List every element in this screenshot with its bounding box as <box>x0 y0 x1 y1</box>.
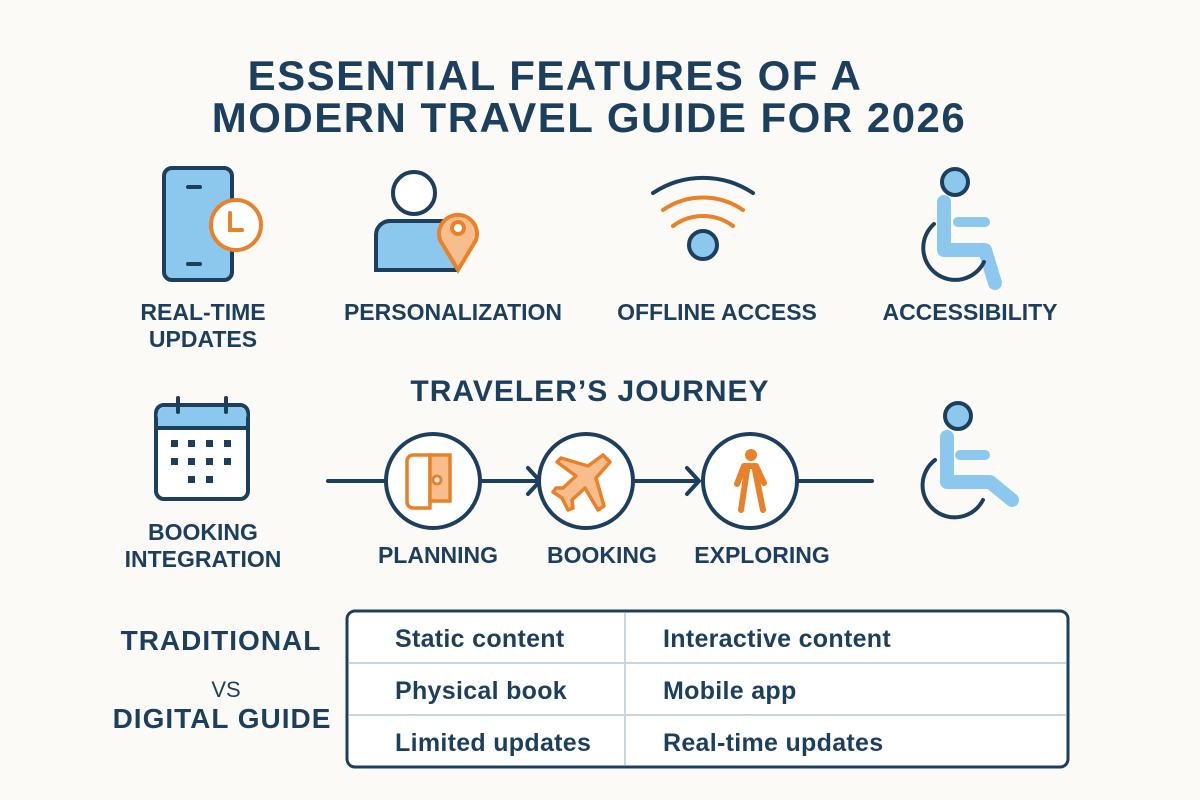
icon: wheelchair 2 <box>923 403 1012 517</box>
title: MODERN TRAVEL GUIDE FOR 2026 <box>212 94 966 141</box>
label: traditional vs digital: DIGITAL GUIDE <box>113 703 331 734</box>
label: booking integration <box>125 519 281 572</box>
label: offline access: OFFLINE ACCESS <box>617 299 817 325</box>
icon: person with pin <box>376 172 477 270</box>
step: exploring: EXPLORING <box>694 542 830 568</box>
label: real-time updates: UPDATES <box>149 326 257 352</box>
label: traditional vs digital: VS <box>211 677 241 702</box>
title <box>212 52 966 141</box>
step: planning: PLANNING <box>378 542 498 568</box>
icon: wifi <box>653 178 753 259</box>
label: accessibility: ACCESSIBILITY <box>882 299 1058 325</box>
label: real-time updates <box>140 299 266 352</box>
step: booking <box>539 434 657 568</box>
label: traditional vs digital <box>113 625 331 734</box>
label: traditional vs digital: TRADITIONAL <box>121 625 321 656</box>
title: ESSENTIAL FEATURES OF A <box>248 52 862 99</box>
step: planning <box>378 434 498 568</box>
label: real-time updates: REAL-TIME <box>140 299 266 325</box>
comparison table <box>347 611 1068 767</box>
step: booking: BOOKING <box>547 542 657 568</box>
icon: wheelchair 1 <box>923 169 995 283</box>
comparison table: Static content <box>395 625 565 653</box>
comparison table: Real-time updates <box>663 729 883 757</box>
comparison table: Mobile app <box>663 677 797 705</box>
label: booking integration: BOOKING <box>148 519 258 545</box>
journey line with arrows <box>328 468 872 494</box>
label: personalization: PERSONALIZATION <box>344 299 562 325</box>
comparison table: Interactive content <box>663 625 891 653</box>
step: exploring <box>694 434 830 568</box>
comparison table: Limited updates <box>395 729 591 757</box>
icon: calendar <box>156 398 248 499</box>
icon: phone with clock <box>164 168 261 280</box>
heading: traveler's journey: TRAVELER’S JOURNEY <box>410 375 770 408</box>
comparison table: Physical book <box>395 677 567 705</box>
label: booking integration: INTEGRATION <box>125 546 281 572</box>
